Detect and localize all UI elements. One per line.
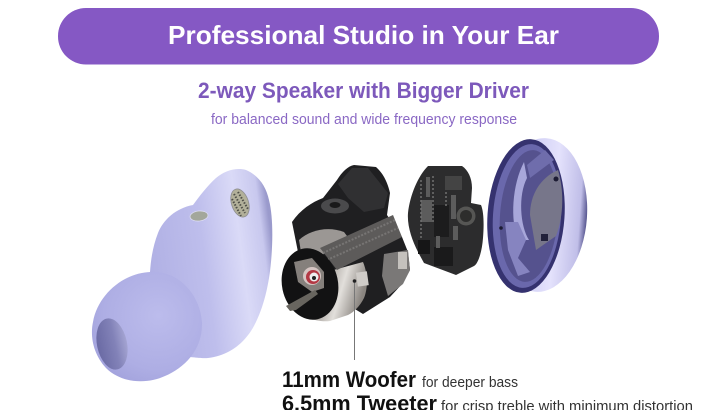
icon: microphone (456, 206, 476, 226)
earbud cap (482, 135, 592, 295)
icon: eartip opening (92, 315, 132, 373)
driver assembly (275, 165, 410, 325)
tweeter label (282, 391, 693, 410)
upper black housing (292, 165, 410, 314)
header pill (58, 8, 659, 64)
grey band (320, 215, 402, 270)
woofer label: 11mm Woofer (282, 367, 416, 392)
leader line (353, 279, 356, 360)
silver cylinder (308, 262, 367, 321)
icon: front ring (275, 243, 345, 325)
icon: tweeter centre (294, 258, 324, 292)
PCB components (418, 176, 476, 266)
right bracket (382, 250, 410, 296)
eartip (92, 272, 202, 381)
connector (286, 290, 318, 311)
circuit board (408, 166, 484, 275)
subtitle: 2-way Speaker with Bigger Driver (198, 78, 529, 103)
woofer label: for deeper bass (422, 374, 518, 391)
cap inner details (499, 150, 562, 276)
earbud body (92, 169, 272, 381)
woofer label (282, 367, 518, 392)
icon: speaker grille (227, 187, 253, 219)
description: for balanced sound and wide frequency response (211, 112, 517, 128)
title: Professional Studio in Your Ear (168, 20, 559, 50)
icon: small sensor (190, 210, 208, 222)
